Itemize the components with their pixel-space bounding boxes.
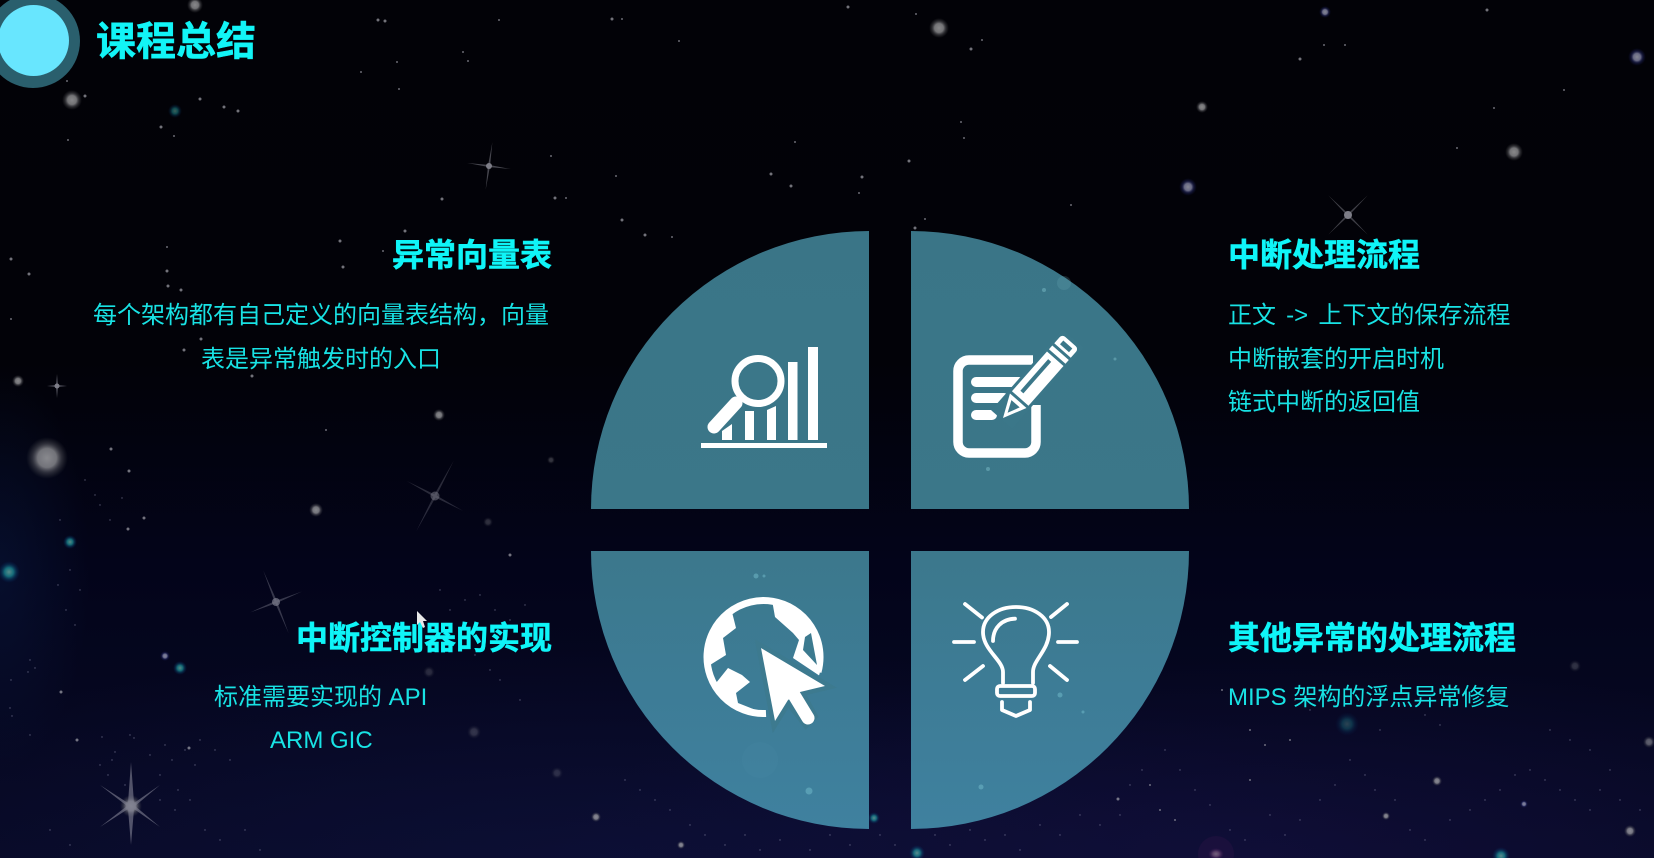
icon: notepad and pencil [958, 329, 1084, 453]
header badge circle [0, 0, 80, 88]
description list [1228, 302, 1510, 416]
pie diagram of four quadrants [591, 231, 1189, 829]
heading: 其他异常的处理流程 [1228, 620, 1516, 656]
description: 每个架构都有自己定义的向量表结构，向量 [93, 302, 549, 329]
text block: interrupt controller implementation [214, 620, 552, 754]
panel: top-right quadrant with notepad icon [911, 231, 1189, 509]
faint stars showing through [986, 276, 1116, 471]
description: MIPS 架构的浮点异常修复 [1228, 684, 1509, 711]
panel: bottom-right quadrant with light bulb icon [911, 551, 1189, 829]
faint stars showing through [742, 574, 812, 794]
panel: bottom-left quadrant with globe icon [591, 551, 869, 829]
panel: top-left quadrant with analytics icon [591, 231, 869, 509]
icon: magnifier over bar chart [701, 347, 827, 448]
title: 课程总结 [96, 20, 256, 64]
text block: other exception handling flow [1228, 620, 1516, 711]
description: 表是异常触发时的入口 [201, 346, 441, 373]
icon: light bulb [954, 604, 1077, 716]
faint stars showing through [978, 692, 1084, 790]
description: ARM GIC [270, 727, 373, 754]
icon: globe with cursor [695, 600, 830, 725]
description list: 正文 -> 上下文的保存流程 [1228, 302, 1510, 329]
description: 标准需要实现的 API [214, 684, 427, 711]
description list: 链式中断的返回值 [1228, 389, 1420, 416]
star dust [10, 480, 1640, 850]
heading: 异常向量表 [392, 237, 552, 273]
text block: interrupt handling flow [1228, 237, 1510, 416]
icon: mouse pointer [417, 611, 427, 628]
description list: 中断嵌套的开启时机 [1228, 346, 1444, 373]
heading: 中断控制器的实现 [296, 620, 552, 656]
sparkles [47, 139, 1388, 845]
text block: exception vector table [93, 237, 552, 373]
description [93, 302, 549, 373]
heading: 中断处理流程 [1228, 237, 1420, 273]
description [214, 684, 427, 754]
